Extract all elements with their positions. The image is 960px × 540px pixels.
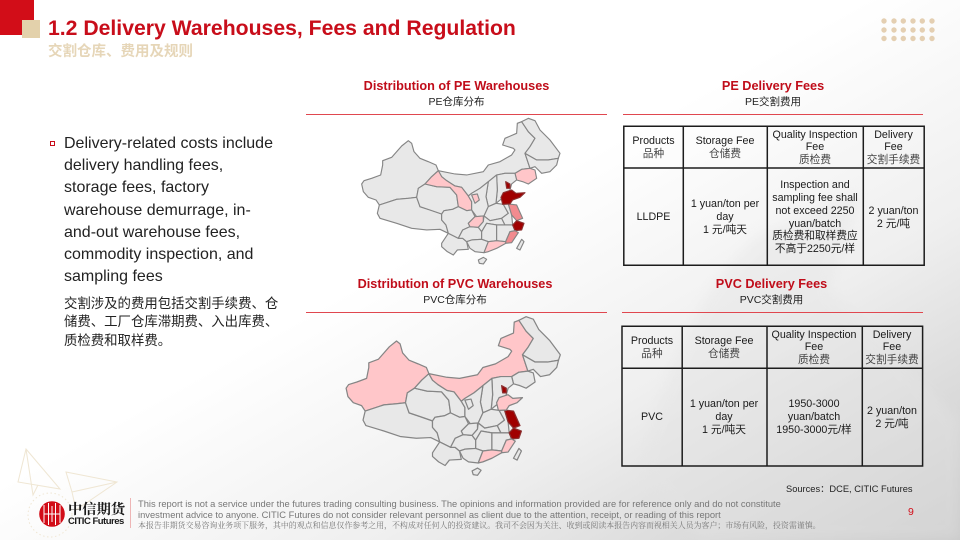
table: PVC delivery fees: 仓储费 xyxy=(708,348,740,360)
heading: PVC warehouses: PVC仓库分布 xyxy=(423,294,487,306)
table: PE delivery fees: Storage Fee xyxy=(696,135,754,147)
table: PE delivery fees: Fee xyxy=(884,141,903,153)
table: PVC delivery fees: Fee xyxy=(883,341,901,353)
text block: English description: delivery handling fees, xyxy=(64,157,223,174)
text block: Chinese description xyxy=(64,296,278,348)
table: PVC delivery fees: day xyxy=(715,411,733,423)
text block: English description: sampling fees xyxy=(64,268,163,285)
disclaimer: investment advice to anyone. CITIC Futures do not consider relevant personnel as client due to the attention, receipt, or reading of this report xyxy=(138,510,721,520)
heading: PE warehouses xyxy=(364,79,549,108)
text block: English description: Delivery-related costs include xyxy=(64,135,273,152)
text block: Chinese description: 储费、工厂仓库滞期费、入出库费、 xyxy=(64,314,278,329)
text block: English description: and-out warehouse fees, xyxy=(64,224,240,241)
table: PE delivery fees: 交割手续费 xyxy=(867,154,920,166)
heading: PVC warehouses xyxy=(358,277,552,306)
table: PE delivery fees: 仓储费 xyxy=(709,148,741,160)
table: PVC delivery fees: Delivery xyxy=(873,329,911,341)
heading: PE warehouses: PE仓库分布 xyxy=(428,96,484,108)
heading: PVC fees xyxy=(716,277,827,306)
text block: Chinese description: 交割涉及的费用包括交割手续费、仓 xyxy=(64,296,278,311)
logo: CITIC Futures xyxy=(39,501,65,527)
table: PE delivery fees: 品种 xyxy=(643,148,664,160)
table: PVC delivery fees: 2 元/吨 xyxy=(875,418,909,430)
table: PE delivery fees: 1 元/吨天 xyxy=(703,224,747,236)
table: PVC delivery fees: 1950-3000元/样 xyxy=(776,424,852,436)
table: PVC delivery fees: 2 yuan/ton xyxy=(867,405,917,417)
disclaimer xyxy=(138,499,781,520)
table: PE delivery fees: 质检费和取样费应 xyxy=(772,230,858,242)
table: PE delivery fees: Fee xyxy=(806,141,824,153)
logo text: 中信期货 xyxy=(68,499,125,519)
heading: PE warehouses: Distribution of PE Warehouses xyxy=(364,79,549,93)
table: PE delivery fees: 2 yuan/ton xyxy=(869,205,918,217)
table: PVC delivery fees xyxy=(631,329,919,436)
disclaimer Chinese: 本报告非期货交易咨询业务项下服务，其中的观点和信息仅作参考之用，不构成对任何人的投资建议。我司不会因为关注、收到或阅读本报告内容而视相关人员为客户；市场有风险，投资需谨慎。 xyxy=(138,520,821,531)
subtitle: 交割仓库、费用及规则 xyxy=(48,44,193,60)
table: PE delivery fees: sampling fee shall xyxy=(772,192,858,204)
icon: decorative dot grid xyxy=(881,18,935,42)
table: PE delivery fees: day xyxy=(716,211,734,223)
table: PVC delivery fees: 1950-3000 xyxy=(788,398,840,410)
table: PE delivery fees: Inspection and xyxy=(780,179,850,191)
table: PE delivery fees: 不高于2250元/样 xyxy=(775,243,855,255)
table: PVC delivery fees: 交割手续费 xyxy=(865,354,919,366)
table: PVC delivery fees: PVC xyxy=(641,411,663,423)
table: PE delivery fees: Quality Inspection xyxy=(773,129,857,141)
table: PE delivery fees xyxy=(632,129,920,255)
table: PVC delivery fees: yuan/batch xyxy=(788,411,840,423)
heading: PVC warehouses: Distribution of PVC Warehouses xyxy=(358,277,552,291)
title: 1.2 Delivery Warehouses, Fees and Regulation xyxy=(48,17,516,40)
text block: English description: storage fees, factory xyxy=(64,179,209,196)
heading: PVC fees: PVC交割费用 xyxy=(740,294,803,306)
heading: PE fees: PE交割费用 xyxy=(745,96,801,108)
table: PVC delivery fees: Quality Inspection xyxy=(772,329,856,341)
table: PVC delivery fees: 1 元/吨天 xyxy=(702,424,746,436)
heading: PVC fees: PVC Delivery Fees xyxy=(716,277,827,291)
table: PE delivery fees: 2 元/吨 xyxy=(877,218,910,230)
text block: English description: warehouse demurrage, in- xyxy=(64,202,251,219)
table: PVC delivery fees: 质检费 xyxy=(798,354,830,366)
table: PE delivery fees: yuan/batch xyxy=(789,218,841,230)
text block: English description xyxy=(64,135,273,285)
table: PE delivery fees: 1 yuan/ton per xyxy=(691,198,759,210)
table: PVC delivery fees: Fee xyxy=(805,341,823,353)
table: PE delivery fees: Products xyxy=(632,135,675,147)
text block: Chinese description: 质检费和取样费。 xyxy=(64,333,171,348)
table: PE delivery fees: Delivery xyxy=(874,129,913,141)
table: PVC delivery fees: Storage Fee xyxy=(695,335,753,347)
icon: bullet xyxy=(50,141,54,146)
table: PE delivery fees: 质检费 xyxy=(799,154,831,166)
table: PVC delivery fees: 1 yuan/ton per xyxy=(690,398,758,410)
heading: PE fees xyxy=(722,79,824,108)
table: PE delivery fees: LLDPE xyxy=(637,211,670,223)
heading: PE fees: PE Delivery Fees xyxy=(722,79,824,93)
table: PE delivery fees: not exceed 2250 xyxy=(775,205,855,217)
table: PVC delivery fees: Products xyxy=(631,335,673,347)
icon: paper planes xyxy=(18,448,118,538)
icon: CITIC emblem xyxy=(39,501,65,527)
table: PVC delivery fees: 品种 xyxy=(641,348,663,360)
text block: English description: commodity inspection, and xyxy=(64,246,253,263)
source note: Sources：DCE, CITIC Futures xyxy=(786,484,913,494)
page number: 9 xyxy=(908,506,914,518)
logo english text: CITIC Futures xyxy=(68,516,124,527)
header decoration squares xyxy=(0,0,40,38)
disclaimer: This report is not a service under the futures trading consulting business. The opinions and information provided are for reference only and do not constitute xyxy=(138,499,781,509)
